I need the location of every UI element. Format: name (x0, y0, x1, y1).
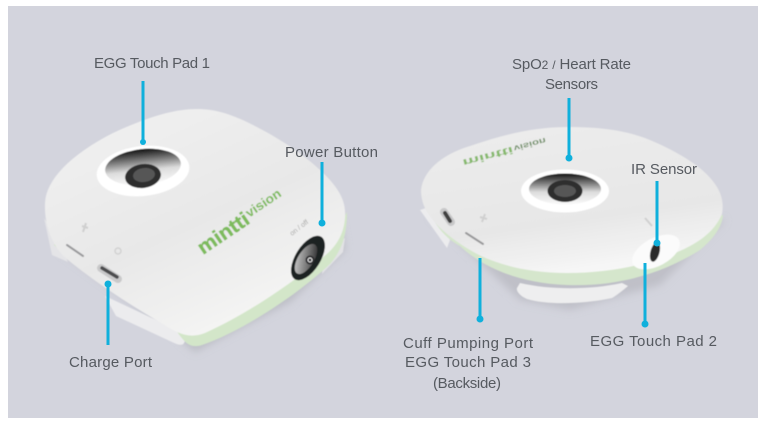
pointer: Cuff Pumping Port (476, 258, 484, 322)
label: SpO2 / Heart Rate Sensors: SpO2 / Heart Rate (512, 56, 631, 73)
left device on/off label: on / off (289, 219, 310, 238)
left device body (45, 109, 345, 336)
left device speaker slot (67, 245, 83, 256)
left device logo: vision (242, 186, 284, 220)
right device ports (444, 212, 451, 222)
pointer: Charge Port (104, 280, 112, 345)
label: IR Sensor: IR Sensor (631, 161, 697, 178)
right device logo: vision (513, 136, 547, 153)
right device symbols (480, 214, 652, 226)
label: EGG Touch Pad 2: EGG Touch Pad 2 (590, 333, 717, 350)
left device clips (44, 218, 68, 262)
right device lens ring (521, 170, 609, 212)
left device charge port (101, 268, 118, 279)
left device symbols (82, 223, 88, 232)
label: EGG Touch Pad 1: EGG Touch Pad 1 (94, 55, 210, 72)
left device logo (193, 186, 288, 259)
label: SpO2 / Heart Rate Sensors (512, 56, 631, 93)
left device lens ring (94, 141, 192, 201)
right device body (421, 127, 723, 273)
right device (420, 127, 725, 310)
pointer: EGG Touch Pad 1 (140, 81, 146, 145)
right device IR sensor (626, 227, 686, 277)
label: Cuff Pumping Port, EGG Touch Pad 3 (403, 335, 534, 392)
left device logo: mintti (193, 208, 254, 259)
label: Power Button: Power Button (285, 144, 378, 161)
pointer: SpO2 sensors (566, 98, 572, 162)
label: SpO2 / Heart Rate Sensors: Sensors (545, 76, 598, 93)
right device logo (461, 135, 547, 168)
label: Cuff Pumping Port, EGG Touch Pad 3: EGG Touch Pad 3 (405, 354, 531, 371)
pointer: EGG Touch Pad 2 (642, 263, 648, 328)
right device speaker slot (466, 233, 483, 244)
label: Charge Port: Charge Port (69, 354, 153, 371)
right device clips (420, 208, 450, 248)
right device logo: mintti (461, 144, 515, 168)
pointer: Power Button (318, 162, 326, 226)
left device (44, 109, 347, 352)
left device power button (284, 230, 332, 286)
label: Cuff Pumping Port, EGG Touch Pad 3: (Backside) (433, 375, 501, 392)
pointer: IR Sensor (654, 181, 660, 246)
label: Cuff Pumping Port, EGG Touch Pad 3: Cuff Pumping Port (403, 335, 534, 352)
